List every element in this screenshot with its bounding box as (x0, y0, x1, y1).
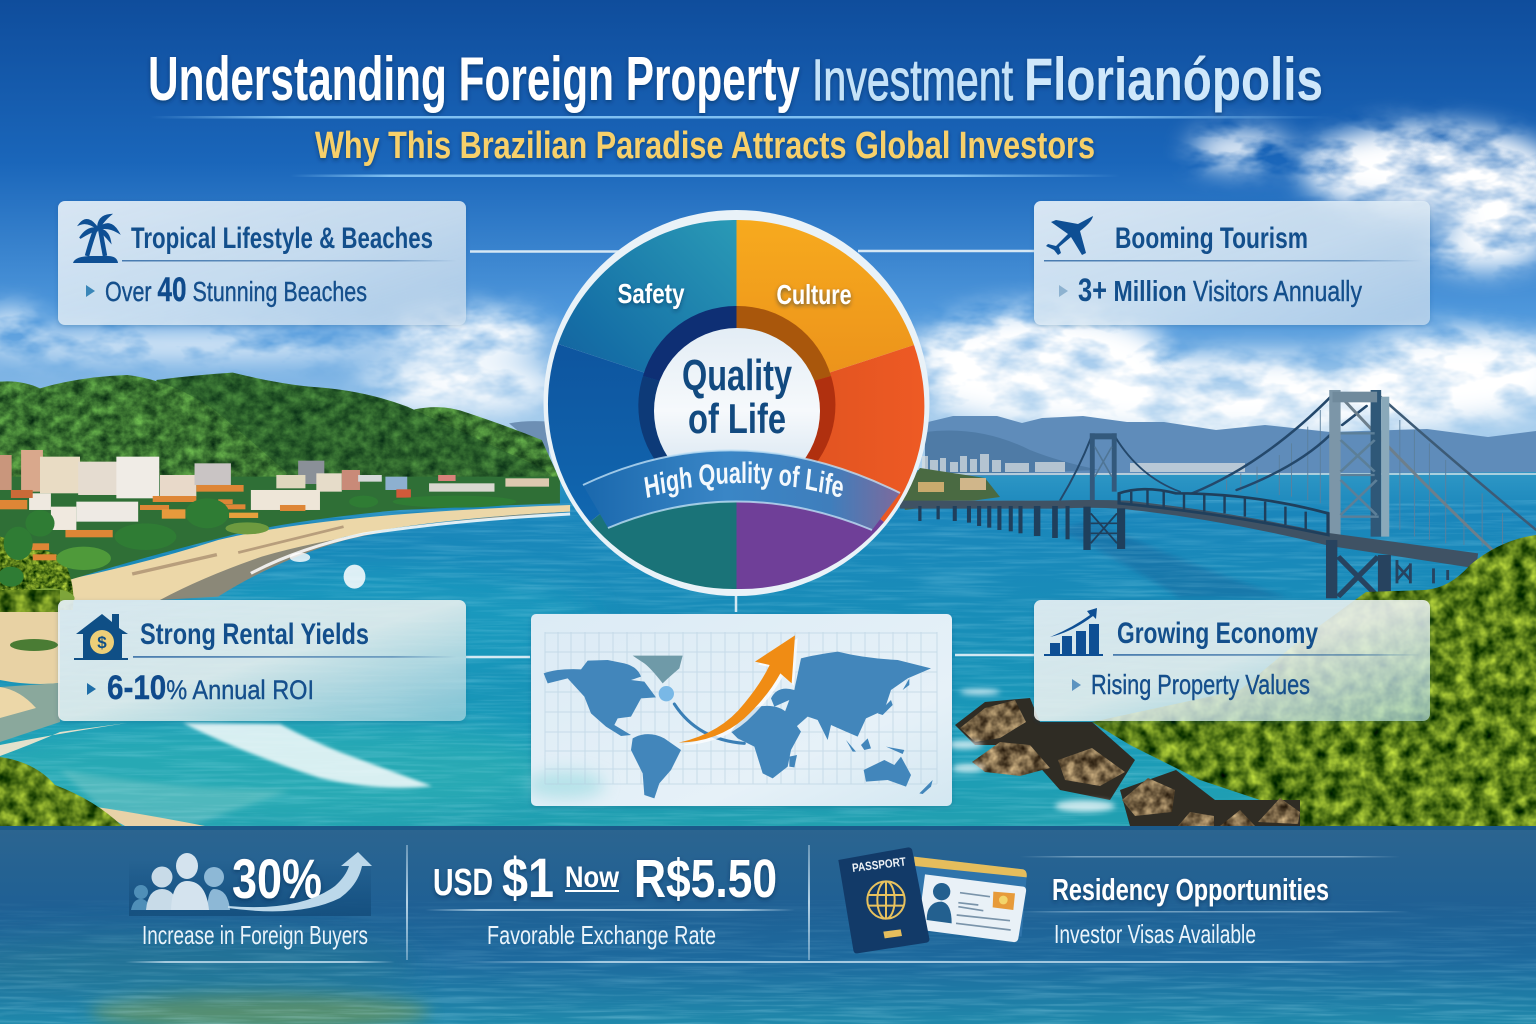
card: Growing Economy (1034, 600, 1430, 721)
center label: Quality (682, 351, 792, 400)
caption: Increase in Foreign Buyers (142, 920, 368, 950)
card: Strong Rental Yields (58, 600, 466, 721)
heading: Booming Tourism (1115, 222, 1308, 255)
card: Booming Tourism (1034, 201, 1430, 325)
bullet (1072, 679, 1081, 691)
background: beach and town (0, 450, 570, 610)
Greenland (633, 656, 683, 683)
title: Understanding Foreign Property (148, 45, 800, 114)
title: Investment (812, 48, 1013, 113)
icon: rising bar chart (1044, 608, 1103, 656)
heading: Tropical Lifestyle & Beaches (131, 222, 433, 255)
segment: Culture (736, 220, 914, 403)
label: Safety: Safety (618, 278, 685, 309)
inner ring (638, 306, 835, 480)
stat: exchange rate (425, 846, 795, 950)
figure: 30%: 30% (232, 847, 322, 910)
label: Culture: Culture (776, 279, 852, 310)
figure: USD $1 Now R$5.50: R$5.50 (634, 849, 777, 909)
bullet (1059, 285, 1068, 297)
stat: residency opportunities (1020, 856, 1410, 949)
icon: house with dollar (74, 614, 128, 660)
icon: airplane (1046, 216, 1093, 255)
background: clouds (0, 126, 1536, 433)
panel: world map (525, 614, 952, 806)
heading: Growing Economy (1117, 617, 1318, 650)
icon: palm tree (73, 215, 118, 263)
banner: High Quality of Life (582, 450, 900, 531)
banner: High Quality of Life: High Quality of Life (644, 461, 843, 498)
subtitle underline (290, 174, 1120, 177)
background: turquoise shallows (0, 500, 1536, 830)
figure: USD $1 Now R$5.50: Now (565, 861, 620, 894)
stat text: 3+ Million Visitors Annually (1078, 272, 1362, 308)
stat text: Rising Property Values (1091, 669, 1310, 700)
icon: passport: PASSPORT (851, 854, 907, 875)
center label: of Life (688, 395, 786, 442)
background: tropical sky (0, 0, 1536, 540)
stat text: 6-10% Annual ROI (107, 669, 314, 707)
center label (682, 351, 792, 442)
icon: rising arrow (228, 852, 372, 911)
connector lines (466, 251, 1034, 657)
bullet (86, 285, 95, 297)
heading: Strong Rental Yields (140, 618, 369, 651)
segment: right red (736, 345, 924, 522)
figure: USD $1 Now R$5.50: $1 (502, 846, 554, 909)
origin marker (659, 686, 674, 701)
card: Tropical Lifestyle & Beaches (58, 201, 466, 325)
illustration: Hercilio Luz suspension bridge (900, 390, 1536, 598)
background: distant mountains (925, 416, 1536, 476)
icon: passport (838, 847, 929, 953)
background: green hills (0, 373, 560, 510)
segment: bottom teal (590, 403, 736, 589)
caption: Investor Visas Available (1054, 919, 1256, 949)
icon: group of people (131, 853, 230, 910)
background: bridge-side headland (900, 468, 1000, 510)
subtitle: Why This Brazilian Paradise Attracts Global Investors (315, 125, 1095, 167)
chart: quality of life wheel (544, 210, 930, 596)
center disc (654, 328, 820, 494)
background: right coast foliage and rocks (947, 535, 1536, 826)
title: Florianópolis (1024, 46, 1323, 113)
segment: Safety (558, 220, 736, 403)
background: sea (0, 470, 1536, 830)
segment: bottom purple (736, 403, 884, 589)
continents (544, 652, 933, 798)
bullet (87, 683, 96, 695)
figure: USD $1 Now R$5.50: USD (433, 862, 493, 904)
segment: left blue (548, 344, 736, 522)
stat text: Over 40 Stunning Beaches (105, 271, 367, 309)
icon: house with dollar: $ (97, 633, 107, 652)
title underline (150, 116, 1330, 118)
icon: ID card (914, 857, 1027, 942)
stat: foreign buyers (129, 847, 372, 950)
flight curve (674, 704, 744, 743)
background: left lower shore (0, 590, 432, 826)
panel: bottom stats band (0, 826, 1536, 1024)
growth arrow (679, 635, 798, 745)
heading: Residency Opportunities (1052, 872, 1329, 907)
figure: USD $1 Now R$5.50 (433, 846, 777, 909)
caption: Favorable Exchange Rate (487, 920, 716, 950)
background: far shore city (900, 454, 1536, 475)
